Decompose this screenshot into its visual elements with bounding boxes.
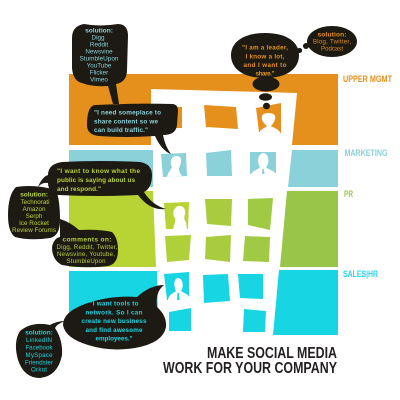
callout: leader thought bubble: and I want to [244,62,287,69]
callout: PR quote: public is saying about us [57,177,135,184]
label: sales and HR: SALES|HR [343,269,378,279]
title: WORK FOR YOUR COMPANY [163,360,338,377]
callout: sales quote: create new business [82,318,147,325]
callout: sales quote: employees." [96,336,132,342]
panel: marketing band [69,150,338,187]
callout: PR quote: and respond." [57,186,101,193]
callout: PR solution list: Amazon [22,206,46,213]
callout: content solution list: Digg [92,34,105,42]
callout: content solution list: YouTube [87,62,112,70]
callout: content solution list: Vimeo [90,76,108,84]
callout: marketing quote: share content so we [94,118,158,126]
callout: sales solution list [16,321,65,378]
callout: PR comments list: comments on: [62,236,112,244]
callout: sales quote: network. So I can [86,310,143,316]
callout: sales solution list: Orkut [31,366,47,374]
callout: PR comments list: Digg, Reddit, Twitter, [56,244,118,251]
callout: content solution list [72,24,128,104]
callout: PR solution list: Review Forums [12,227,56,234]
callout: content solution list: Reddit [90,42,108,48]
callout: leader thought bubble [231,33,309,109]
title: MAKE SOCIAL MEDIA [207,345,337,362]
callout: PR quote: "I want to know what the [57,168,140,175]
callout: PR solution list: Ice Rocket [19,220,49,227]
icon: sales person [168,278,189,300]
callout: PR solution list: Serph [26,213,43,220]
callout: content solution list: solution: [85,28,113,34]
label: PR: PR [344,189,353,199]
icon: marketing man [251,153,276,174]
callout: content solution list: StumbleUpon [80,56,119,62]
callout: content solution list: Flicker [90,70,108,76]
callout: sales solution list: Facebook [26,344,53,352]
callout: marketing quote [87,104,178,154]
callout: PR comments list: Newsvine, Youtube, [57,251,115,258]
callout: PR quote [38,161,166,209]
callout: marketing quote: "I need someplace to [94,110,161,116]
icon: PR person [173,206,187,229]
label: marketing: MARKETING [344,148,388,158]
panel: upper management band [69,74,338,145]
icon: upper management person [259,113,281,134]
title [163,345,338,377]
callout: PR solution list [8,186,60,239]
callout: marketing quote: can build traffic." [94,127,148,134]
callout: sales solution list: solution: [25,330,53,336]
callout: leader solution bubble: Podcast [321,46,343,52]
callout: PR comments list [52,219,118,267]
callout: sales solution list: Friendster [25,360,53,366]
callout: sales quote [63,285,166,349]
callout: leader thought bubble: I know a lot, [246,54,285,60]
callout: sales solution list: MySpace [26,352,53,359]
callout: leader solution bubble [307,26,357,57]
callout: leader thought bubble: "I am a leader, [242,44,288,52]
panel: PR band [69,191,338,267]
callout: PR solution list: Technorati [20,199,50,206]
callout: PR solution list: solution: [20,192,48,198]
callout: leader solution bubble: solution: [318,32,346,38]
callout: PR comments list: StumbleUpon [66,258,106,265]
callout: sales quote: "I want tools to [90,300,139,308]
icon: marketing woman [167,156,182,177]
callout: sales solution list: LinkedIN [26,337,52,344]
callout: leader solution bubble: Blog, Twitter, [313,40,351,46]
callout: leader thought bubble: share." [256,70,274,78]
callout: content solution list: Newsvine [85,48,113,56]
callout: sales quote: and find awesome [86,327,143,334]
panel: sales and HR band [69,270,338,335]
